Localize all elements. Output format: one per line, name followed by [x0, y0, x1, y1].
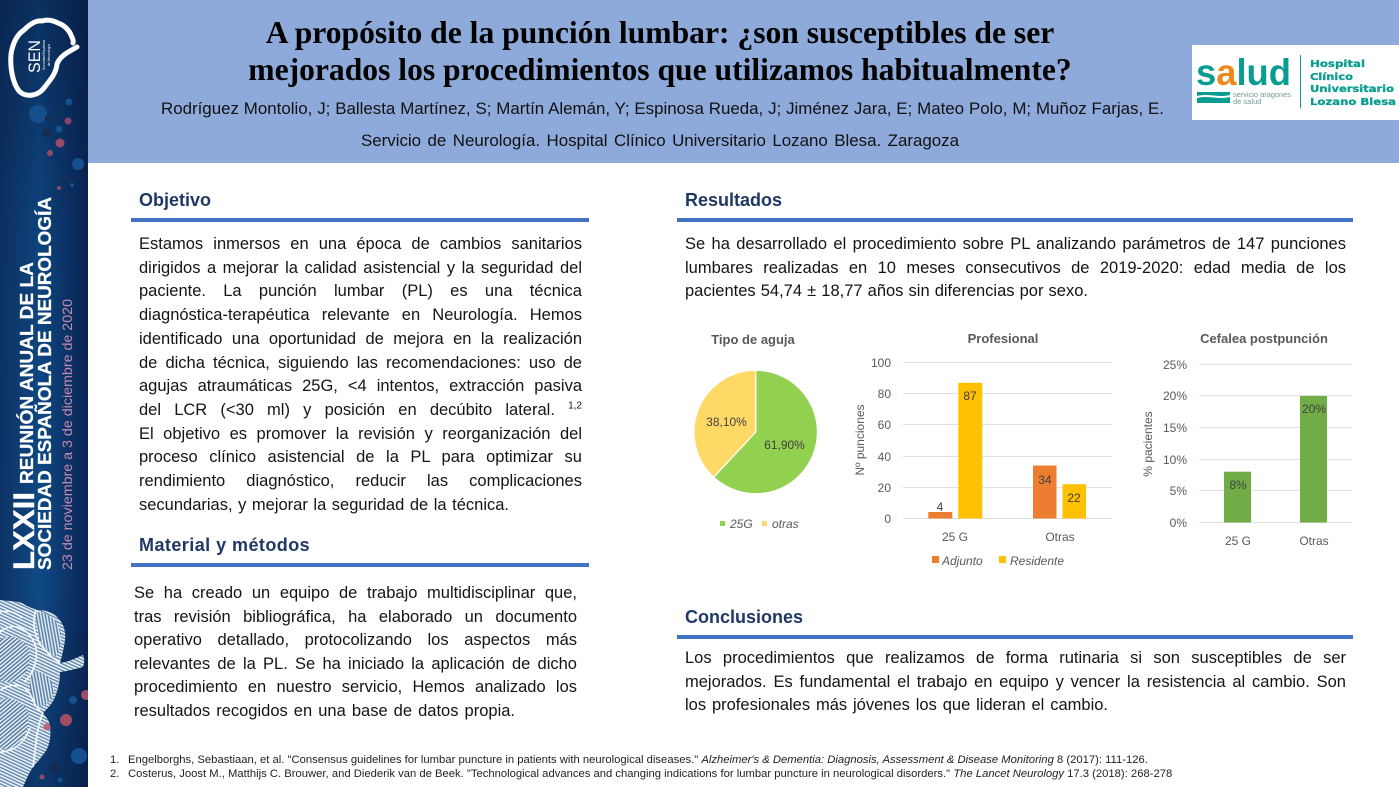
- text: Objetivo: proceso clínico asistencial de la PL para optimizar su: [139, 448, 582, 466]
- text: Objetivo: del LCR (<30 ml) y posición en decúbito lateral. 1,2: [139, 401, 582, 419]
- pie chart: Tipo de aguja: 38,10%: [706, 415, 747, 429]
- bar chart: Cefalea postpunción: 20%: [1163, 389, 1187, 403]
- bar chart: Cefalea postpunción: 15%: [1163, 421, 1187, 435]
- pie chart: Tipo de aguja: Tipo de aguja: [711, 332, 796, 347]
- text: Objetivo: secundarias, y mejorar la seguridad de la técnica.: [139, 496, 509, 514]
- text: Material y métodos: tras revisión bibliográfica, ha elaborado un documento: [134, 608, 577, 626]
- text: Objetivo: Estamos inmersos en una época de cambios sanitarios: [139, 235, 582, 253]
- text: Material y métodos: operativo detallado, protocolizando los aspectos más: [134, 631, 577, 649]
- text: Conclusiones: mejorados. Es fundamental el trabajo en equipo y vencer la resistencia al cambio. Son: [685, 673, 1346, 691]
- text: Conclusiones: Los procedimientos que realizamos de forma rutinaria si son susceptibles de ser: [685, 649, 1346, 667]
- congress title text: 23 de noviembre a 3 de diciembre de 2020: [59, 299, 75, 570]
- bar chart: Cefalea postpunción: 25 G: [1225, 534, 1251, 548]
- text: Objetivo: paciente. La punción lumbar (PL) es una técnica: [139, 282, 582, 300]
- bar chart: Cefalea postpunción: Cefalea postpunción: [1200, 331, 1328, 346]
- text: Objetivo: El objetivo es promover la revisión y reorganización del: [139, 425, 582, 443]
- text: Material y métodos: relevantes de la PL. Se ha iniciado la aplicación de dicho: [134, 654, 577, 672]
- text: Objetivo: identificado una oportunidad de mejora en la realización: [139, 330, 582, 348]
- bar chart: Profesional: Residente: [1010, 554, 1064, 568]
- references: Engelborghs, Sebastiaan, et al. "Consensus guidelines for lumbar puncture in patients with neurological diseases." Alzheimer's & Dementia: Diagnosis, Assessment & Disease Monitoring 8 (2017): 111-126.: [128, 754, 1148, 766]
- bar chart: Profesional: 40: [878, 450, 891, 464]
- congress title text: [8, 197, 75, 570]
- pie chart: Tipo de aguja: [694, 332, 817, 531]
- icon: SEN brain logo: SEN: [25, 40, 44, 73]
- references: 1.: [110, 754, 119, 766]
- references: Costerus, Joost M., Matthijs C. Brouwer, and Diederik van de Beek. "Technological advances and changing indications for lumbar puncture in neurological disorders." The Lancet Neurology 17.3 (2018): 268-278: [128, 768, 1172, 780]
- dots bottom: [40, 690, 91, 782]
- icon: SEN brain logo: [11, 20, 77, 95]
- text: Material y métodos: [134, 584, 577, 720]
- bar chart: Profesional: 4: [937, 500, 944, 514]
- pie chart: Tipo de aguja: otras: [772, 517, 799, 531]
- bar chart: Profesional: Profesional: [968, 331, 1038, 346]
- text: Conclusiones: los profesionales más jóvenes los que lideran el cambio.: [685, 696, 1108, 714]
- bar chart: Profesional: Otras: [1045, 530, 1075, 544]
- hospital logo: Universitario: [1310, 84, 1394, 95]
- hospital logo: de salud: [1233, 97, 1261, 106]
- icon: SEN brain logo: Sociedad Española: [42, 40, 46, 70]
- sidebar: [0, 0, 88, 787]
- congress title text: REUNIÓN ANUAL DE LA: [16, 262, 37, 484]
- bar chart: Cefalea postpunción: 5%: [1170, 484, 1187, 498]
- heading: Material y métodos: Material y métodos: [139, 535, 310, 555]
- bar chart: Profesional: 34: [1038, 473, 1052, 487]
- hospital logo: Lozano Blesa: [1310, 97, 1396, 108]
- bar chart: Profesional: [853, 331, 1112, 568]
- bar chart: Profesional: Nº punciones: [853, 404, 867, 476]
- bar chart: Cefalea postpunción: 8%: [1229, 478, 1247, 492]
- heading: Conclusiones: Conclusiones: [685, 607, 803, 627]
- bar chart: Profesional: 20: [878, 481, 891, 495]
- title: mejorados los procedimientos que utilizamos habitualmente?: [248, 52, 1072, 87]
- bar chart: Profesional: 22: [1067, 491, 1081, 505]
- text: Objetivo: agujas atraumáticas 25G, <4 intentos, extracción pasiva: [139, 377, 582, 395]
- bar chart: Profesional: 100: [871, 356, 891, 370]
- bar chart: Profesional: 87: [963, 389, 977, 403]
- text: Conclusiones: [685, 649, 1346, 714]
- bar chart: Cefalea postpunción: 25%: [1163, 358, 1187, 372]
- bar chart: Cefalea postpunción: 0%: [1170, 516, 1187, 530]
- bar chart: Profesional: 80: [878, 387, 891, 401]
- pie chart: Tipo de aguja: 25G: [729, 517, 753, 531]
- text: Resultados: Se ha desarrollado el procedimiento sobre PL analizando parámetros de 147 punciones: [685, 235, 1346, 253]
- hospital logo: [1192, 45, 1399, 120]
- congress title text: LXXII: [8, 492, 41, 570]
- bar chart: Cefalea postpunción: 10%: [1163, 453, 1187, 467]
- heading: Resultados: Resultados: [685, 190, 782, 210]
- congress title text: SOCIEDAD ESPAÑOLA DE NEUROLOGÍA: [34, 197, 55, 570]
- text: Objetivo: diagnóstica-terapéutica relevante en Neurología. Hemos: [139, 306, 582, 324]
- hospital logo: salud: [1196, 52, 1291, 93]
- bar chart: Profesional: 25 G: [942, 530, 968, 544]
- bar chart: Cefalea postpunción: [1141, 331, 1352, 548]
- bar chart: Cefalea postpunción: % pacientes: [1141, 411, 1155, 477]
- text: Material y métodos: resultados recogidos en una base de datos propia.: [134, 702, 515, 720]
- text: Resultados: lumbares realizadas en 10 meses consecutivos de 2019-2020: edad media de los: [685, 259, 1346, 277]
- affiliation: Servicio de Neurología. Hospital Clínico Universitario Lozano Blesa. Zaragoza: [361, 131, 959, 150]
- text: Objetivo: [139, 235, 582, 514]
- text: Objetivo: de dicha técnica, siguiendo las recomendaciones: uso de: [139, 354, 582, 372]
- text: Resultados: pacientes 54,74 ± 18,77 años sin diferencias por sexo.: [685, 282, 1088, 300]
- icon: SEN brain logo: de Neurología: [47, 44, 51, 66]
- text: Material y métodos: procedimiento en nuestro servicio, Hemos analizado los: [134, 678, 577, 696]
- hospital logo: servicio aragones: [1233, 90, 1291, 99]
- header band: [88, 0, 1399, 163]
- text: Objetivo: dirigidos a mejorar la calidad asistencial y la seguridad del: [139, 259, 582, 277]
- text: Resultados: [685, 235, 1346, 300]
- hospital logo: Clínico: [1310, 71, 1353, 83]
- text: Material y métodos: Se ha creado un equipo de trabajo multidisciplinar que,: [134, 584, 577, 602]
- dots top: [29, 98, 84, 190]
- bar chart: Profesional: Adjunto: [941, 554, 983, 568]
- brain illustration: [0, 600, 84, 787]
- title: [248, 15, 1072, 87]
- bar chart: Profesional: 0: [884, 512, 891, 526]
- bar chart: Cefalea postpunción: Otras: [1299, 534, 1329, 548]
- bar chart: Profesional: 60: [878, 418, 891, 432]
- title: A propósito de la punción lumbar: ¿son susceptibles de ser: [266, 15, 1054, 50]
- bar chart: Cefalea postpunción: 20%: [1302, 402, 1326, 416]
- heading: Objetivo: Objetivo: [139, 190, 211, 210]
- references: [110, 754, 1172, 780]
- hospital logo: Hospital: [1310, 59, 1365, 70]
- text: Objetivo: rendimiento diagnóstico, reducir las complicaciones: [139, 472, 582, 490]
- references: 2.: [110, 768, 119, 780]
- authors: Rodríguez Montolio, J; Ballesta Martínez, S; Martín Alemán, Y; Espinosa Rueda, J; Jiménez Jara, E; Mateo Polo, M; Muñoz Farjas, E.: [161, 99, 1164, 118]
- pie chart: Tipo de aguja: 61,90%: [764, 438, 805, 452]
